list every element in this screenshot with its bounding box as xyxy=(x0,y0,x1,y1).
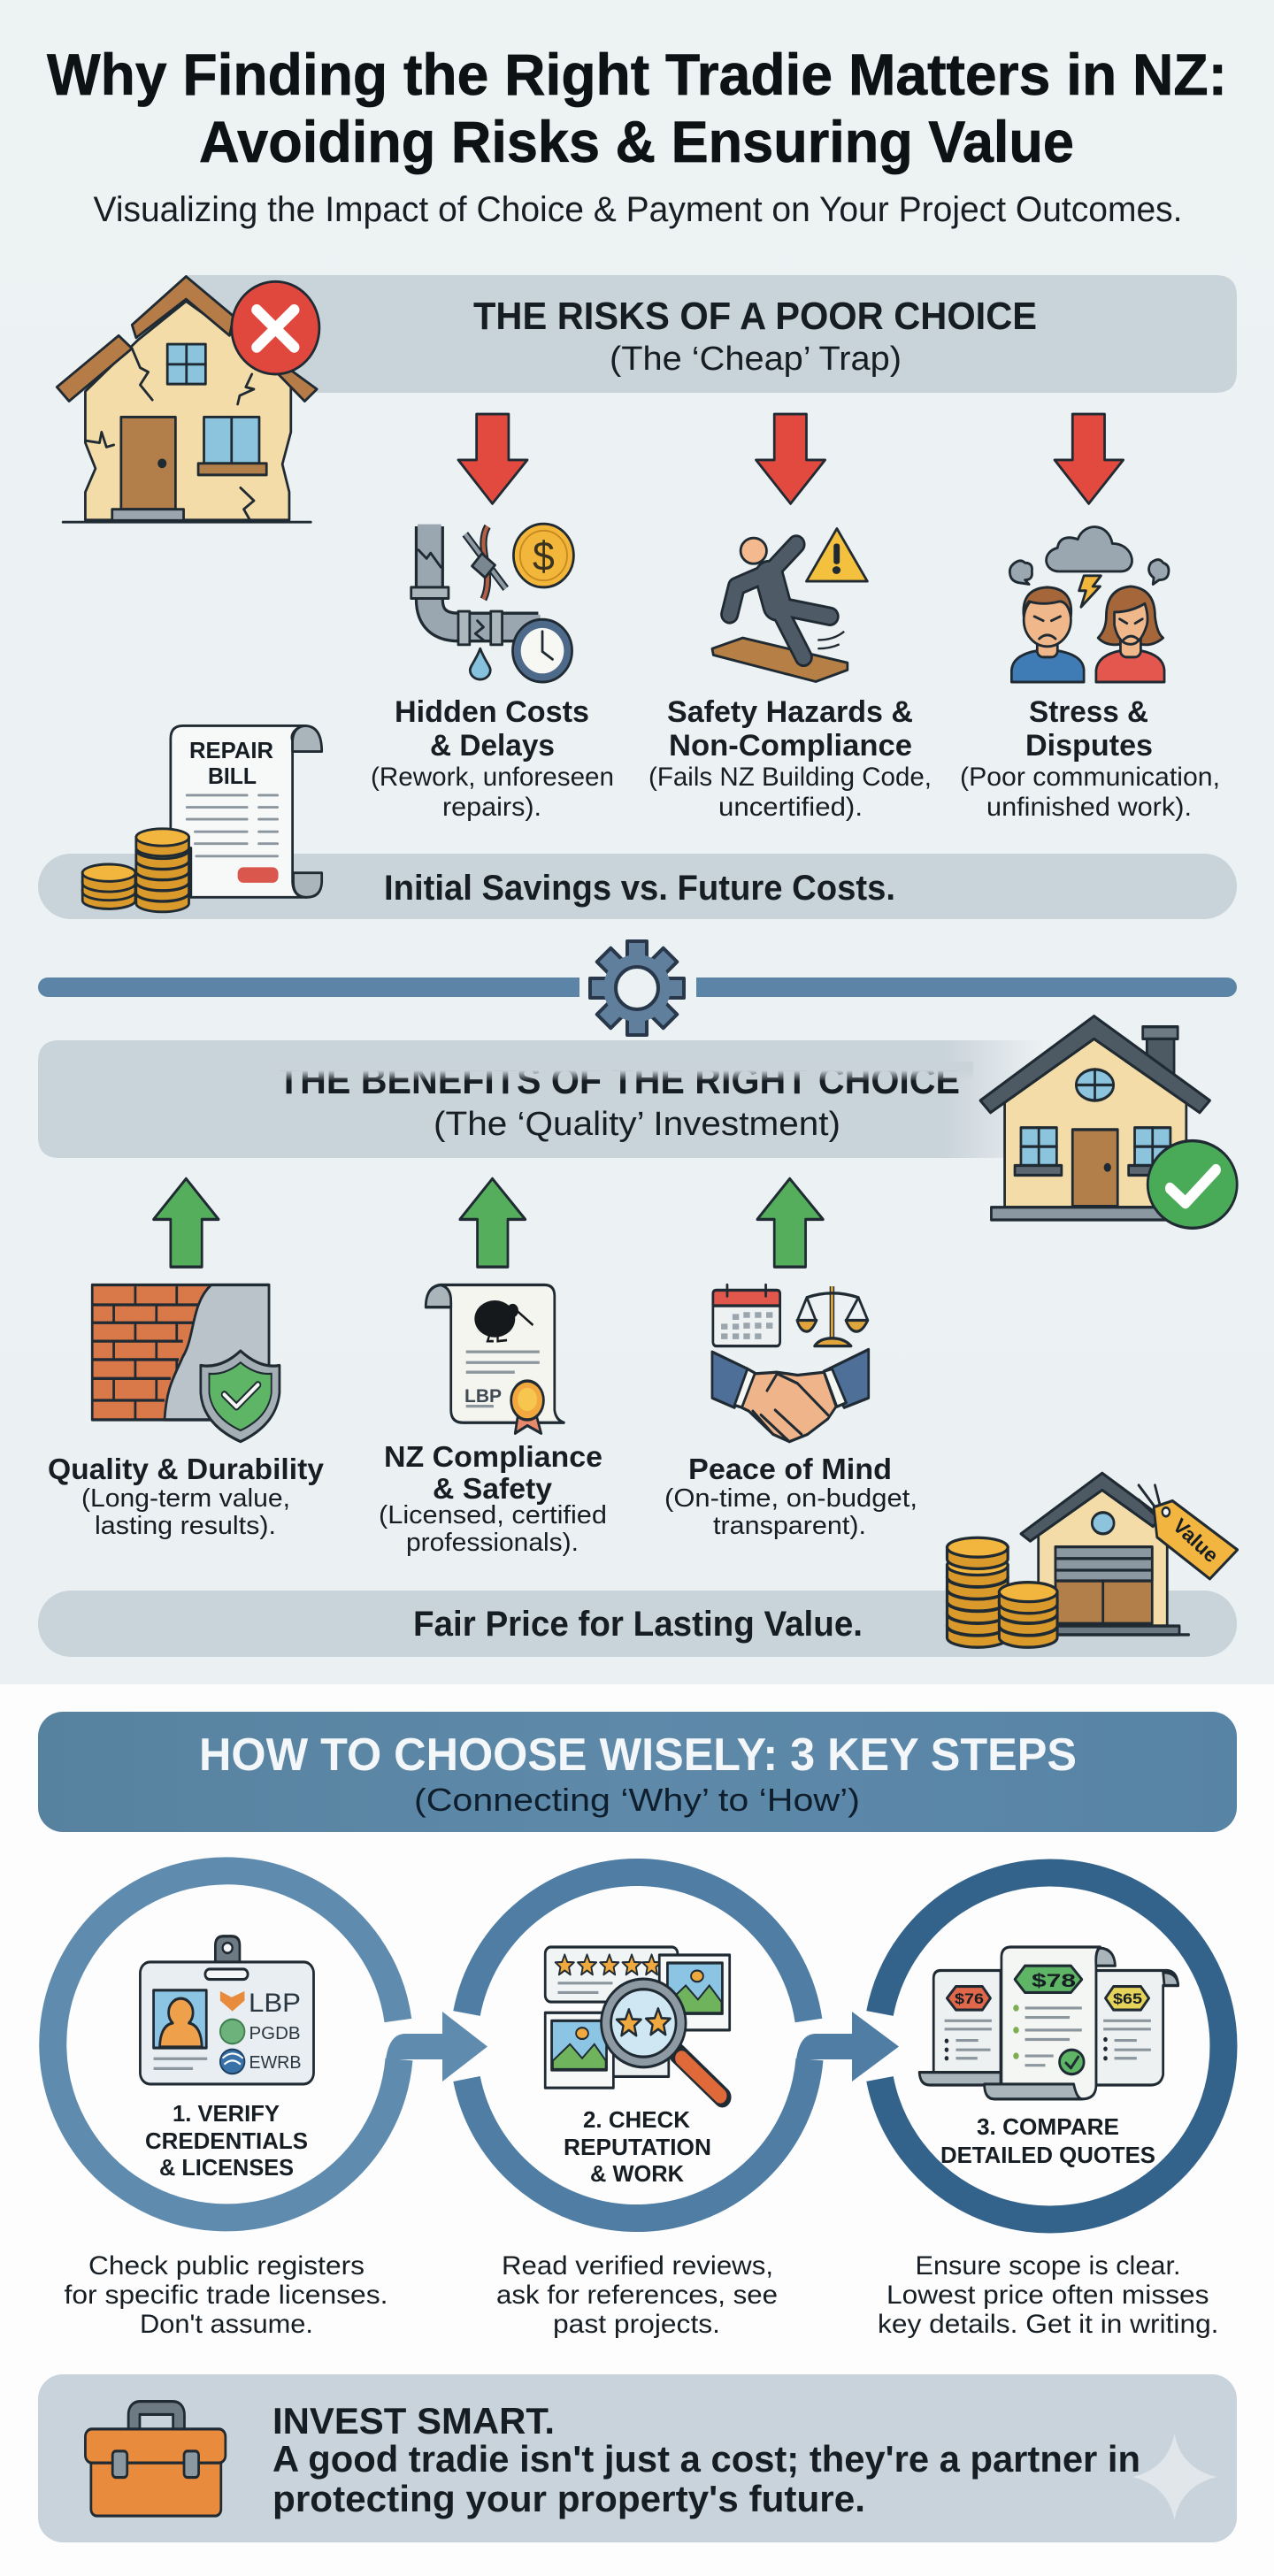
step 1 description: Don't assume. xyxy=(140,2310,313,2339)
step 2 label: 2. CHECK xyxy=(583,2106,690,2133)
panel: how to choose header xyxy=(38,1712,1237,1832)
divider right bar xyxy=(696,978,1237,997)
step 1 description: Check public registers xyxy=(88,2251,365,2281)
icon: arguing couple under storm cloud xyxy=(1009,527,1169,682)
quality and durability text: (Long-term value, xyxy=(81,1484,290,1513)
hidden costs text xyxy=(371,695,614,822)
hidden costs text: (Rework, unforeseen xyxy=(371,763,614,792)
arrow: up from compliance xyxy=(460,1178,526,1267)
panel: risks header band xyxy=(186,275,1237,393)
panel: benefits header band xyxy=(38,1040,1044,1158)
title xyxy=(47,42,1227,174)
stress and disputes text: (Poor communication, xyxy=(960,763,1220,792)
step 3 label: DETAILED QUOTES xyxy=(940,2142,1155,2168)
safety hazards text xyxy=(649,695,932,822)
step 1 label: 1. VERIFY xyxy=(173,2100,280,2127)
safety hazards text: Non-Compliance xyxy=(669,729,912,763)
band text: Fair Price for Lasting Value. xyxy=(413,1605,863,1644)
step 3 description: key details. Get it in writing. xyxy=(878,2310,1219,2339)
arrow: down to stress xyxy=(1055,414,1124,503)
hidden costs text: repairs). xyxy=(442,793,541,822)
peace of mind text xyxy=(664,1453,917,1540)
compliance text: & Safety xyxy=(433,1472,553,1505)
stress and disputes text xyxy=(960,695,1220,822)
safety hazards text: uncertified). xyxy=(718,793,863,822)
title: Why Finding the Right Tradie Matters in NZ: xyxy=(47,42,1227,107)
hidden costs text: & Delays xyxy=(430,729,555,763)
stress and disputes text: Disputes xyxy=(1025,729,1153,763)
arrow: up from quality xyxy=(154,1178,219,1267)
title: Avoiding Risks & Ensuring Value xyxy=(199,109,1074,174)
icon: reviews, photos and magnifier xyxy=(545,1947,730,2097)
icon: repair bill and coins: BILL xyxy=(208,763,257,789)
arrow: down to hidden costs xyxy=(458,414,527,503)
risks subheading: (The ‘Cheap’ Trap) xyxy=(610,341,902,378)
background: upper section xyxy=(0,0,1274,1684)
risks heading: THE RISKS OF A POOR CHOICE xyxy=(473,295,1037,338)
step 3 description: Lowest price often misses xyxy=(886,2281,1209,2310)
icon: brick wall with shield xyxy=(92,1284,280,1442)
stress and disputes text: Stress & xyxy=(1029,695,1148,729)
step 2 label: & WORK xyxy=(590,2160,684,2187)
ring: step 3 xyxy=(879,1873,1224,2220)
band text: Initial Savings vs. Future Costs. xyxy=(384,869,895,908)
icon: broken pipe, wires, coin and clock: $ xyxy=(533,533,555,579)
step 1 label: CREDENTIALS xyxy=(145,2128,308,2154)
step 1 label xyxy=(145,2100,308,2181)
peace of mind text: transparent). xyxy=(713,1512,866,1540)
benefits subheading: (The ‘Quality’ Investment) xyxy=(434,1106,840,1143)
step 2 description: Read verified reviews, xyxy=(502,2251,773,2281)
safety hazards text: Safety Hazards & xyxy=(667,695,913,729)
callout text: protecting your property's future. xyxy=(272,2478,865,2519)
hidden costs text: Hidden Costs xyxy=(395,695,589,729)
icon: broken pipe, wires, coin and clock xyxy=(411,524,573,682)
step 2 label: REPUTATION xyxy=(564,2134,711,2160)
divider left bar xyxy=(38,978,579,997)
icon: coins, house and value tag xyxy=(947,1473,1238,1647)
step 2 label xyxy=(564,2106,711,2187)
callout text: A good tradie isn't just a cost; they're a partner in xyxy=(272,2438,1140,2480)
callout text: INVEST SMART. xyxy=(272,2400,555,2442)
icon: cracked house with red cross xyxy=(57,276,319,522)
step 1 description: for specific trade licenses. xyxy=(64,2281,388,2310)
step 3 description: Ensure scope is clear. xyxy=(915,2251,1180,2281)
ring: step 2 with arrow xyxy=(467,1872,899,2219)
subtitle: Visualizing the Impact of Choice & Payment on Your Project Outcomes. xyxy=(94,190,1182,229)
icon: three quote documents: $78 xyxy=(1032,1971,1076,1991)
compliance text: (Licensed, certified xyxy=(379,1501,607,1530)
icon: licence badge: LBP xyxy=(249,1989,301,2018)
panel: invest smart callout xyxy=(38,2374,1237,2542)
icon: divider gear xyxy=(590,941,684,1035)
icon: licence badge: EWRB xyxy=(249,2053,301,2073)
peace of mind text: Peace of Mind xyxy=(688,1453,892,1485)
compliance text: NZ Compliance xyxy=(384,1440,602,1473)
safety hazards text: (Fails NZ Building Code, xyxy=(649,763,932,792)
icon: licence badge xyxy=(140,1936,314,2084)
panel: fair price band xyxy=(38,1591,1237,1657)
how to choose heading: HOW TO CHOOSE WISELY: 3 KEY STEPS xyxy=(199,1729,1077,1781)
step 1 description xyxy=(64,2251,388,2339)
icon: good house with green check xyxy=(980,1016,1237,1228)
step 3 label: 3. COMPARE xyxy=(977,2113,1119,2140)
icon: toolbox xyxy=(85,2408,226,2516)
how to choose subheading: (Connecting ‘Why’ to ‘How’) xyxy=(414,1782,860,1818)
icon: repair bill and coins xyxy=(82,725,322,912)
icon: calendar, scales and handshake xyxy=(712,1284,869,1442)
step 2 description: past projects. xyxy=(553,2310,720,2339)
icon: three quote documents: $76 xyxy=(955,1990,984,2007)
compliance text xyxy=(379,1440,607,1557)
panel: initial savings band xyxy=(38,854,1237,919)
callout text xyxy=(272,2400,1140,2519)
ring: step 1 with arrow xyxy=(53,1871,487,2218)
quality and durability text: lasting results). xyxy=(95,1512,276,1540)
icon: LBP certificate with kiwi xyxy=(426,1284,564,1433)
peace of mind text: (On-time, on-budget, xyxy=(664,1484,917,1513)
step 3 description xyxy=(878,2251,1219,2339)
icon: falling person and warning sign xyxy=(712,528,867,682)
icon: LBP certificate with kiwi: LBP xyxy=(464,1386,502,1407)
icon: coins, house and value tag: Value xyxy=(1169,1514,1224,1567)
stress and disputes text: unfinished work). xyxy=(986,793,1192,822)
icon: sparkle xyxy=(1132,2434,1217,2519)
quality and durability text: Quality & Durability xyxy=(48,1453,325,1485)
quality and durability text xyxy=(48,1453,325,1540)
step 1 label: & LICENSES xyxy=(159,2154,294,2181)
icon: three quote documents xyxy=(919,1947,1178,2099)
benefits heading: THE BENEFITS OF THE RIGHT CHOICE xyxy=(278,1059,960,1102)
arrow: down to safety hazards xyxy=(756,414,825,503)
compliance text: professionals). xyxy=(406,1529,579,1557)
step 2 description: ask for references, see xyxy=(496,2281,778,2310)
background: lower section xyxy=(0,1684,1274,2576)
heading top wash-out xyxy=(265,1062,973,1081)
icon: three quote documents: $65 xyxy=(1113,1990,1142,2007)
arrow: up from peace of mind xyxy=(757,1178,823,1267)
step 3 label xyxy=(940,2113,1155,2168)
icon: repair bill and coins: REPAIR xyxy=(189,737,273,763)
icon: licence badge: PGDB xyxy=(249,2024,301,2043)
step 2 description xyxy=(496,2251,778,2339)
